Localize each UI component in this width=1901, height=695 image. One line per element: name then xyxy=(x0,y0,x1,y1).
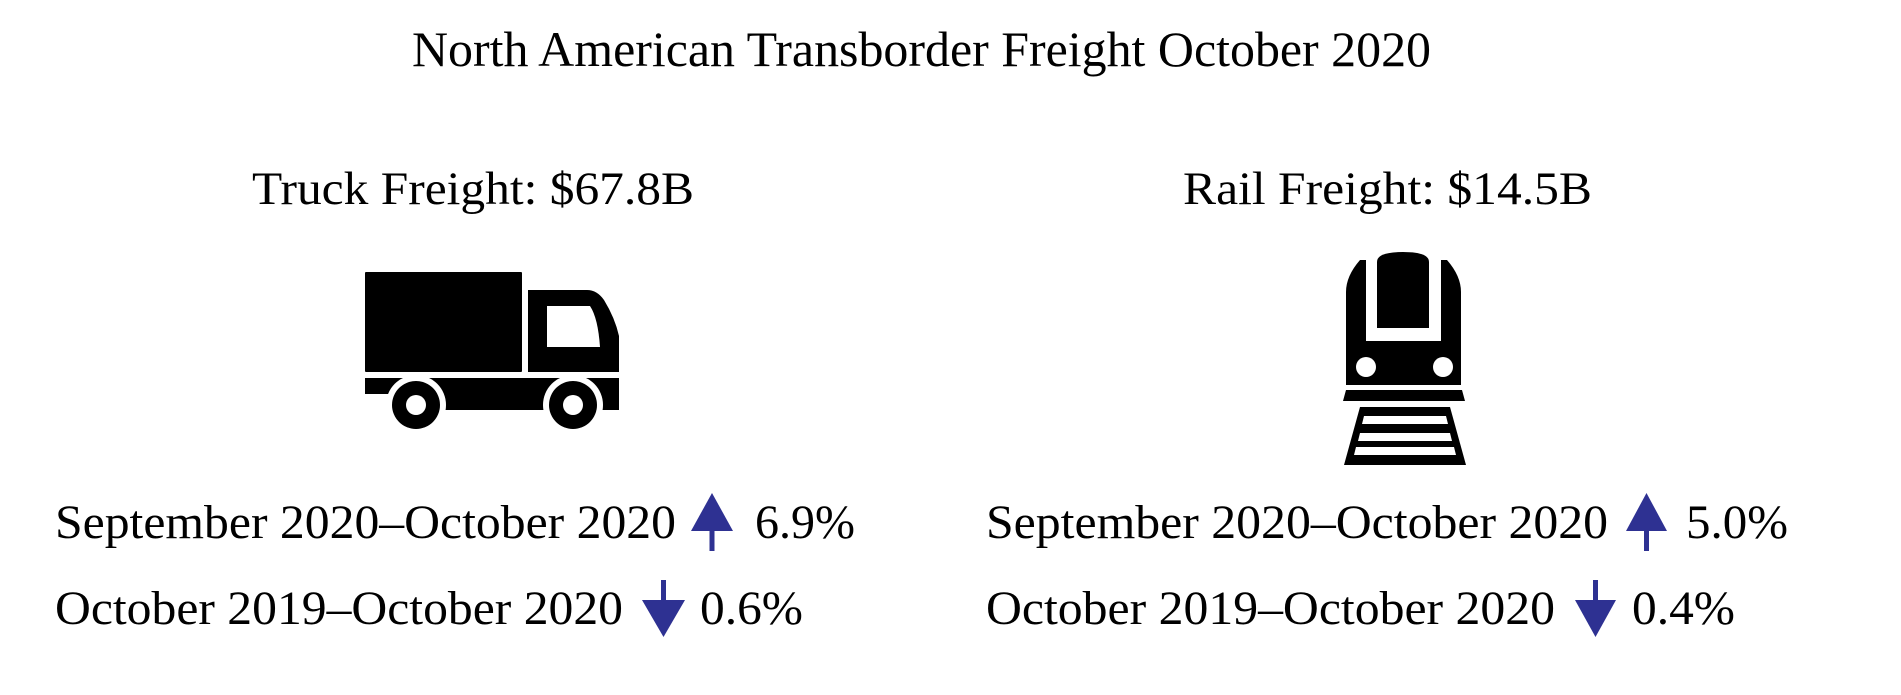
stat row 1: September 2020–October 2020 xyxy=(986,496,1608,549)
panel: rail xyxy=(986,163,1788,637)
stat row 1: 6.9% xyxy=(755,496,855,549)
stat row 1: September 2020–October 2020 xyxy=(55,496,676,549)
icon: up arrow xyxy=(691,493,733,551)
icon: down arrow xyxy=(642,580,685,637)
stat row 2: October 2019–October 2020 xyxy=(55,582,623,635)
icon: down arrow xyxy=(1575,580,1616,637)
stat row 2 xyxy=(986,580,1735,637)
icon: up arrow xyxy=(1626,493,1667,551)
stat row 1 xyxy=(55,493,855,551)
icon: truck xyxy=(365,272,619,435)
title: North American Transborder Freight October 2020 xyxy=(412,21,1431,77)
stat row 2 xyxy=(55,580,803,637)
heading: truck freight: Truck Freight: $67.8B xyxy=(252,163,694,215)
heading: rail freight: Rail Freight: $14.5B xyxy=(1183,163,1592,215)
stat row 2: October 2019–October 2020 xyxy=(986,582,1555,635)
panel: truck xyxy=(55,163,855,637)
stat row 1 xyxy=(986,493,1788,551)
icon: train xyxy=(1343,252,1466,465)
stat row 1: 5.0% xyxy=(1686,496,1788,549)
stat row 2: 0.4% xyxy=(1632,582,1735,635)
stat row 2: 0.6% xyxy=(700,582,803,635)
